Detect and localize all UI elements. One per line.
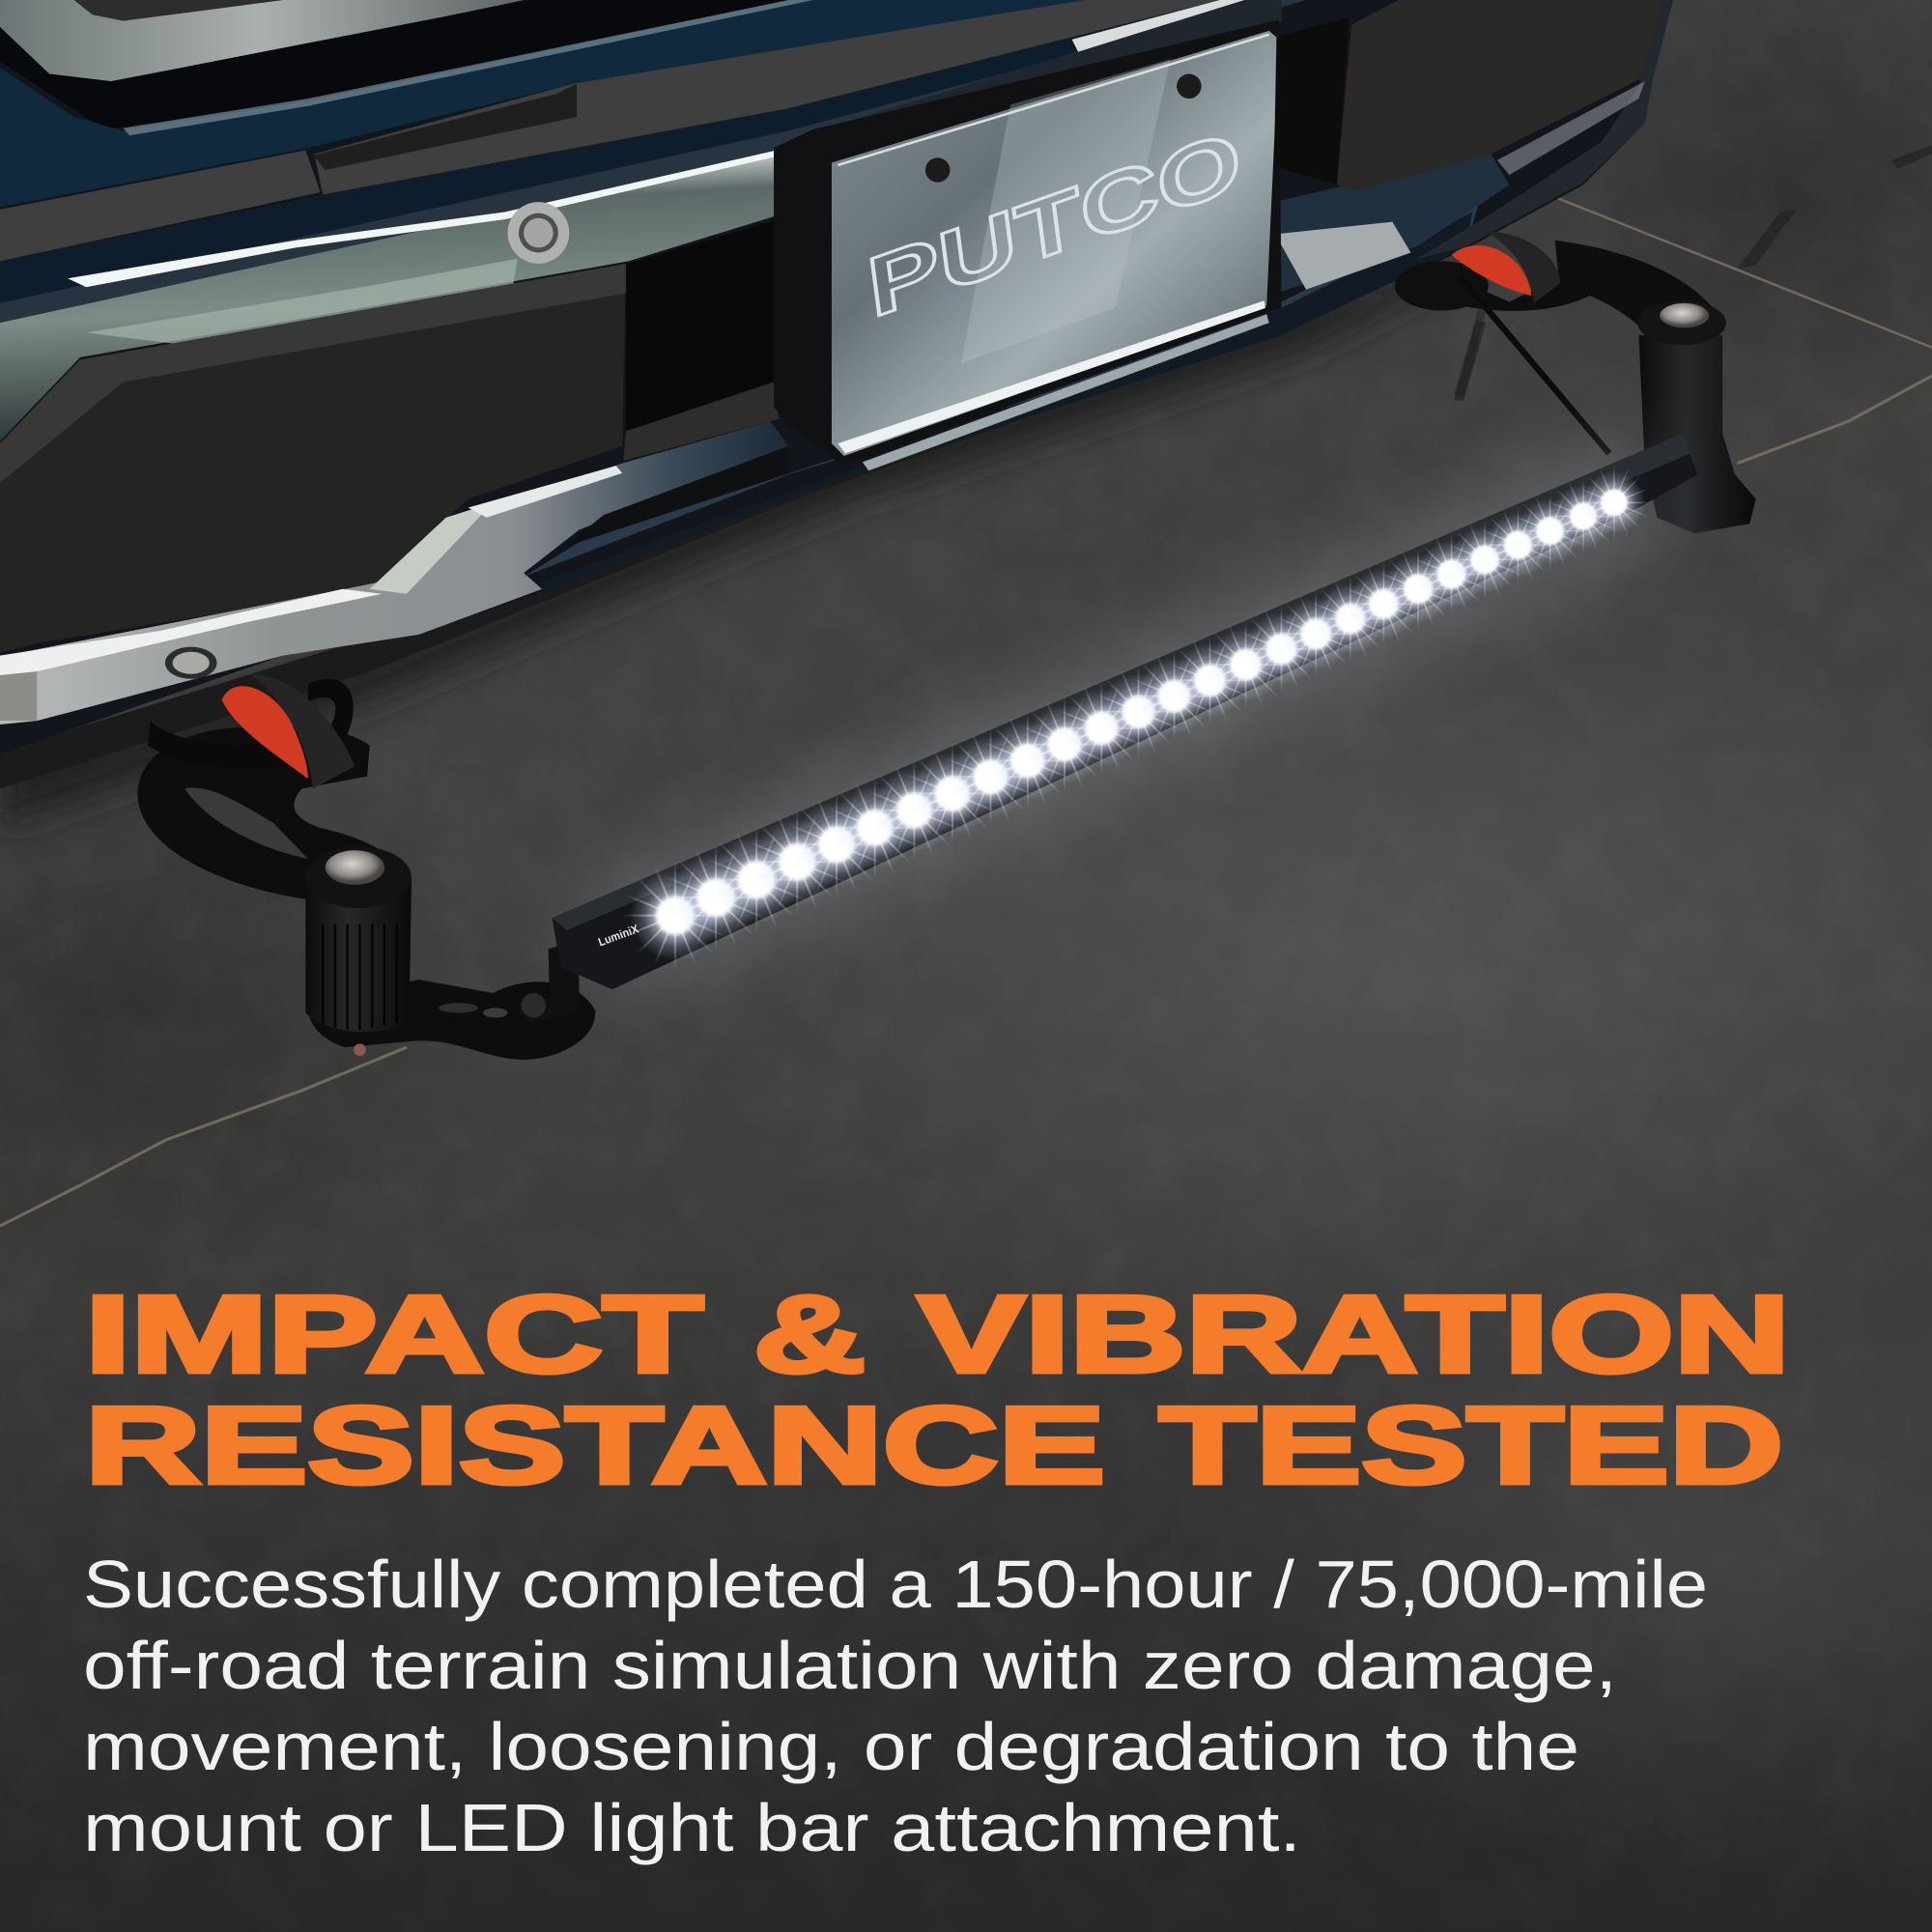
tie strap: [1460, 277, 1609, 453]
LED light bar: [552, 434, 1698, 989]
D-ring: [148, 721, 308, 768]
right chrome upper: [1269, 154, 1509, 296]
body text: mount or LED light bar attachment.: [83, 1790, 1301, 1865]
title: TESTED: [1159, 1384, 1783, 1506]
cast shadow: [1454, 321, 1486, 401]
left mount: bracket, shackle and post: [138, 647, 595, 1060]
navy body panel: [0, 0, 1084, 207]
right bumper edge: [1417, 0, 1673, 259]
LED row: [621, 466, 1652, 969]
floor glow from light bar: [640, 505, 1602, 930]
navy lower band: [0, 0, 1282, 310]
rubber trim upper: [0, 151, 321, 261]
black shadow band: [0, 0, 788, 129]
floor stain marks: [1454, 146, 1932, 397]
lower navy chrome rail: [524, 203, 1479, 577]
title: [85, 1273, 1790, 1506]
bracket bolt: [165, 647, 216, 679]
right black corner panel: [1337, 0, 1663, 191]
side vent: [1274, 17, 1350, 185]
red shackle insert: [1452, 245, 1531, 296]
body text: Successfully completed a 150-hour / 75,000-mile: [83, 1547, 1708, 1622]
lower chrome bar: [0, 421, 788, 724]
right mount: bracket, shackle and post: [1395, 232, 1756, 533]
nut and angle bracket: [515, 943, 579, 1023]
curved mount plate: [138, 726, 409, 899]
vertical post: [305, 877, 412, 1032]
body text: off-road terrain simulation with zero damage,: [83, 1628, 1617, 1703]
title: &: [753, 1273, 866, 1395]
lower bar slot: [567, 446, 788, 545]
chrome right of plate: [801, 0, 1282, 157]
title: IMPACT: [85, 1273, 703, 1395]
licence plate surround: [774, 19, 1282, 466]
chrome main bar: [0, 138, 788, 441]
LuminiX brand: LuminiX: [596, 922, 640, 949]
foot plate: [308, 980, 595, 1060]
mount arm: [1399, 241, 1722, 339]
licence plate with PUTCO: PUTCO: [863, 113, 1246, 336]
title: VIBRATION: [918, 1273, 1790, 1395]
shackle body: [251, 675, 355, 788]
bumper base: [0, 0, 1672, 754]
licence plate with PUTCO: [832, 31, 1279, 456]
truck bumper: [0, 0, 1673, 754]
grille recess: [626, 219, 779, 434]
body text: movement, loosening, or degradation to the: [83, 1709, 1579, 1784]
body text: [83, 1547, 1708, 1865]
parking sensor: [508, 202, 569, 264]
vertical post: [1638, 335, 1756, 533]
grille chrome trim: [0, 0, 524, 81]
trim recess: [313, 84, 577, 170]
title: RESISTANCE: [85, 1384, 1105, 1506]
black plastic lower panel: [0, 264, 626, 653]
bumper shadow on floor: [0, 246, 1516, 828]
floor expansion joints: [0, 197, 1932, 1226]
bar housing: [552, 434, 1698, 989]
shackle body: [1486, 232, 1560, 303]
red shackle insert: [222, 686, 308, 779]
